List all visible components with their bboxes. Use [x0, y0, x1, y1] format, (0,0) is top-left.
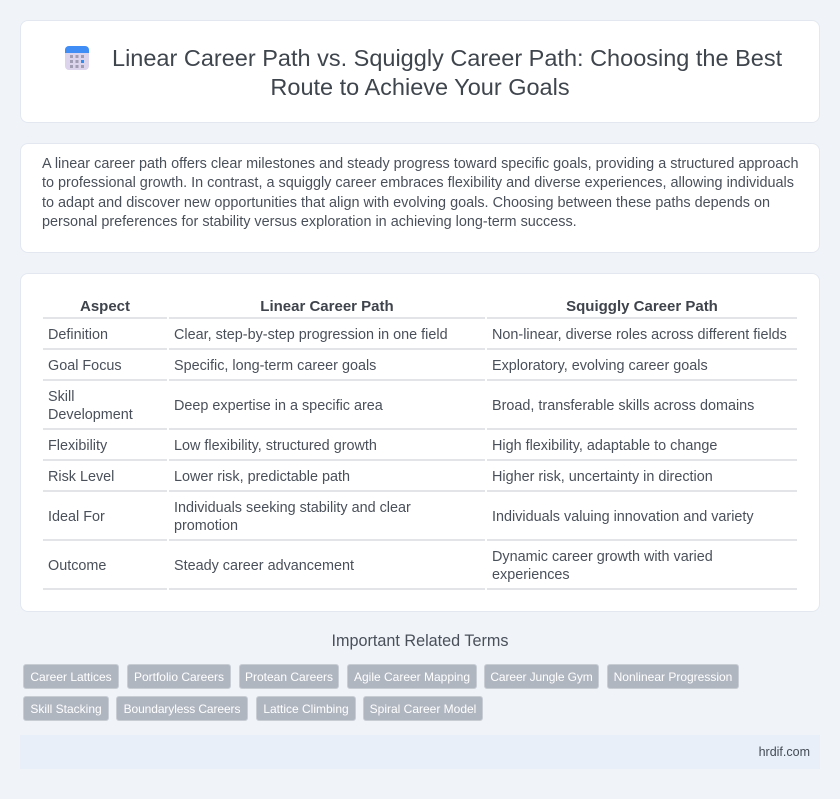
- tag: [23, 696, 109, 721]
- row: flexibility: High flexibility, adaptable to change: [492, 438, 717, 454]
- text block: summary: to adapt and discover new opportunities that align with evolving goals. Choosing between these paths depends on: [42, 195, 770, 211]
- row: risk level: Lower risk, predictable path: [174, 469, 350, 485]
- row: goal focus: Goal Focus: [48, 358, 122, 374]
- heading: related terms: Important Related Terms: [332, 632, 508, 650]
- icon: calendar: [65, 46, 89, 70]
- panel: header: [20, 20, 820, 123]
- tag: [239, 664, 339, 689]
- tag: Portfolio Careers: [134, 670, 224, 684]
- title: Linear Career Path vs. Squiggly Career Path: Choosing the Best: [112, 45, 782, 71]
- row: goal focus: Specific, long-term career goals: [174, 358, 376, 374]
- tag: Lattice Climbing: [263, 702, 349, 716]
- row: skill development: Broad, transferable skills across domains: [492, 398, 754, 414]
- text block: summary: personal preferences for stability versus exploration in achieving long-term success.: [42, 214, 577, 230]
- title: [112, 45, 782, 100]
- table header: Linear Career Path: [260, 298, 394, 315]
- tag: Skill Stacking: [30, 702, 102, 716]
- row: flexibility: [48, 438, 717, 454]
- row: ideal for: Ideal For: [48, 509, 105, 525]
- row: skill development: Deep expertise in a specific area: [174, 398, 383, 414]
- row: ideal for: [48, 500, 754, 534]
- tag: [484, 664, 599, 689]
- row: skill development: Development: [48, 407, 133, 423]
- row: ideal for: Individuals seeking stability and clear: [174, 500, 411, 516]
- footer bar: [20, 735, 820, 769]
- row: ideal for: Individuals valuing innovation and variety: [492, 509, 754, 525]
- row: goal focus: Exploratory, evolving career goals: [492, 358, 708, 374]
- tag: Agile Career Mapping: [354, 670, 470, 684]
- tag: [116, 696, 248, 721]
- table header: Aspect: [80, 298, 130, 315]
- tag: [256, 696, 356, 721]
- row: outcome: Outcome: [48, 558, 106, 574]
- tag: [127, 664, 231, 689]
- row: ideal for: promotion: [174, 518, 238, 534]
- row: risk level: Higher risk, uncertainty in direction: [492, 469, 713, 485]
- tag: Spiral Career Model: [370, 702, 476, 716]
- tag: Career Jungle Gym: [490, 670, 593, 684]
- table header: [80, 298, 718, 315]
- tag: Career Lattices: [30, 670, 112, 684]
- title: Route to Achieve Your Goals: [270, 74, 570, 100]
- row: definition: [48, 327, 787, 343]
- row: goal focus: [48, 358, 708, 374]
- panel: introduction: [20, 143, 820, 253]
- text block: summary: to professional growth. In contrast, a squiggly career embraces flexibility and diverse experiences, allowing individuals: [42, 175, 794, 191]
- row: outcome: experiences: [492, 567, 570, 583]
- row: definition: Clear, step-by-step progression in one field: [174, 327, 448, 343]
- text block: summary: [42, 156, 798, 230]
- tag: Protean Careers: [245, 670, 333, 684]
- tag: Nonlinear Progression: [614, 670, 732, 684]
- row: flexibility: Low flexibility, structured growth: [174, 438, 377, 454]
- row: risk level: Risk Level: [48, 469, 114, 485]
- row: outcome: Dynamic career growth with varied: [492, 549, 713, 565]
- text block: summary: A linear career path offers clear milestones and steady progress toward specific goals, providing a structured approach: [42, 156, 798, 172]
- row: risk level: [48, 469, 713, 485]
- tag: [607, 664, 739, 689]
- tag: [347, 664, 477, 689]
- tag: Boundaryless Careers: [124, 702, 240, 716]
- row: outcome: Steady career advancement: [174, 558, 354, 574]
- row: skill development: [48, 389, 754, 423]
- comparison table: [43, 298, 797, 590]
- footer credit: hrdif.com: [759, 745, 810, 759]
- tag: [363, 696, 483, 721]
- related term tags: [23, 664, 739, 721]
- tag: [23, 664, 119, 689]
- row: definition: Non-linear, diverse roles across different fields: [492, 327, 787, 343]
- row: definition: Definition: [48, 327, 108, 343]
- panel: comparison table: [20, 273, 820, 612]
- table header: Squiggly Career Path: [566, 298, 718, 315]
- row: skill development: Skill: [48, 389, 74, 405]
- row: flexibility: Flexibility: [48, 438, 107, 454]
- row: outcome: [48, 549, 713, 583]
